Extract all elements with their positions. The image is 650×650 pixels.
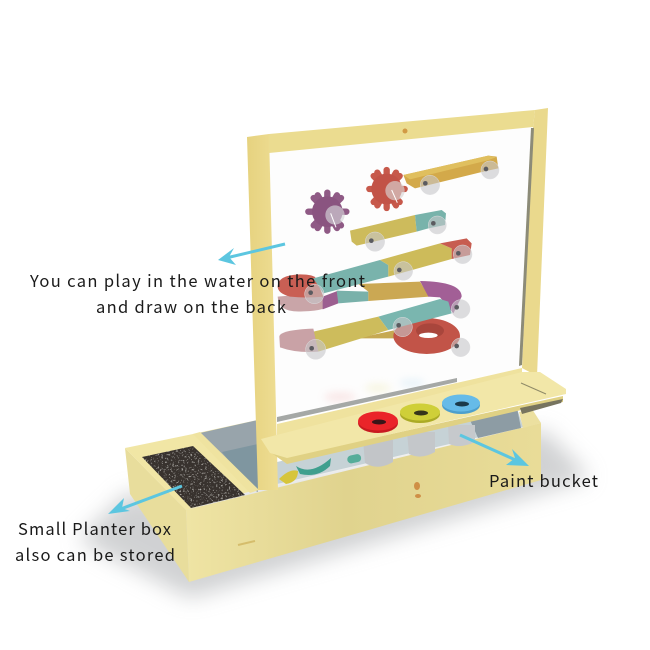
caption: board front and back: and draw on the back — [96, 294, 286, 318]
left post — [247, 134, 278, 490]
rail knot — [402, 128, 408, 134]
right post — [522, 108, 548, 376]
paint shelf — [261, 372, 566, 464]
gear: red — [369, 170, 405, 208]
caption: planter box: also can be stored — [15, 542, 175, 566]
box divider — [193, 432, 259, 493]
track: second — [350, 210, 446, 246]
planter box — [125, 419, 541, 582]
top rail — [269, 110, 535, 153]
suction cups — [305, 161, 499, 359]
caption: planter box — [15, 516, 175, 566]
grey tray lip — [277, 378, 457, 422]
arrow: to paint bucket — [460, 435, 529, 466]
glass pane — [269, 127, 533, 418]
glass reflections — [324, 379, 425, 402]
track: fourth — [323, 281, 462, 313]
track: fifth — [279, 299, 452, 352]
palette: yellow — [400, 404, 440, 423]
red left loop — [278, 274, 324, 312]
paint cups — [363, 425, 475, 467]
planter soil — [142, 446, 245, 508]
box front face — [186, 423, 541, 582]
caption: board front and back — [29, 268, 365, 318]
caption: planter box: Small Planter box — [18, 516, 171, 540]
right support block — [519, 409, 541, 428]
storage items — [279, 453, 362, 484]
track: third — [313, 238, 472, 293]
ground shadow — [78, 430, 590, 598]
box left face — [125, 448, 189, 582]
arrow: to planter box — [108, 486, 182, 514]
red bottom loop — [357, 318, 460, 354]
palette: red — [358, 412, 398, 433]
gear: purple — [308, 193, 346, 231]
box top rim — [125, 419, 262, 510]
marble run on glass — [278, 156, 499, 359]
suction cup centres — [308, 167, 488, 351]
bottom rail — [277, 368, 522, 440]
palette: blue — [442, 394, 480, 414]
caption: board front and back: You can play in the water on the front — [29, 268, 365, 292]
caption: paint bucket: Paint bucket — [489, 468, 598, 492]
paint bucket cavity — [277, 408, 541, 484]
track: top yellow — [403, 156, 498, 188]
wood marks — [238, 482, 421, 545]
arrow: to board front — [218, 244, 285, 265]
board frame and glass — [247, 108, 548, 490]
storage interior — [200, 420, 258, 492]
